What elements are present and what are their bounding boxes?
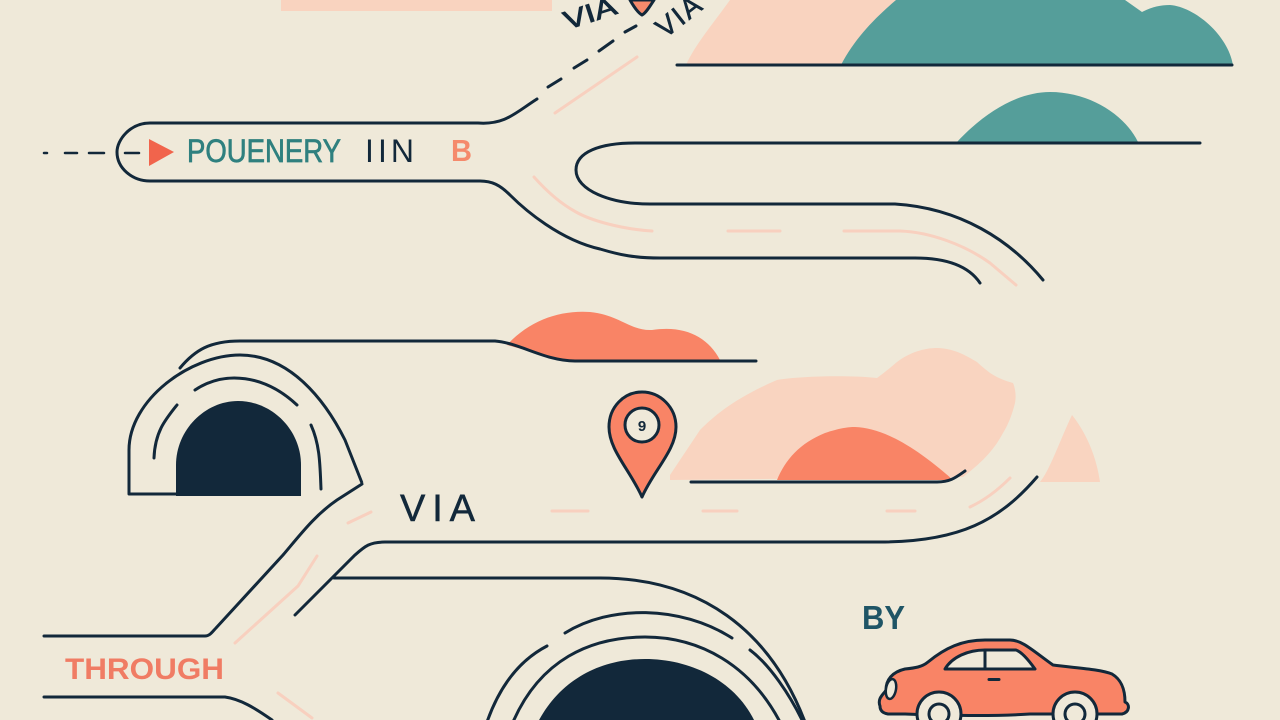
VIA label centre: VIA: [400, 488, 476, 530]
pale cloud landscape: [670, 348, 1100, 482]
pale road centre marks: [235, 57, 1016, 718]
journey label: IIN: [365, 133, 414, 169]
coral half hill: [691, 427, 965, 482]
journey label: [187, 133, 472, 169]
lower tunnel: [334, 578, 805, 720]
pale banner at top: [281, 0, 552, 11]
top pin tip: [630, 0, 654, 15]
play triangle: [149, 139, 174, 166]
entry dashed line: [44, 152, 139, 154]
upper tunnel: [129, 355, 362, 496]
start road capsule: [117, 99, 980, 283]
sweeping main road: [295, 477, 1037, 615]
dashed road to top pin: [548, 26, 636, 87]
THROUGH label: THROUGH: [65, 653, 224, 686]
coral hill on ridge: [180, 312, 756, 368]
BY label: BY: [862, 599, 905, 636]
left road upper branch: [44, 484, 362, 636]
top landscape: hills on horizon line: [677, 0, 1233, 65]
teal hill: [957, 92, 1138, 142]
location pin: 9: [638, 418, 646, 435]
journey label: B: [451, 133, 472, 168]
winding road: [576, 143, 1200, 280]
journey label: POUENERY: [187, 133, 341, 169]
car: [879, 640, 1128, 720]
left road lower branch: [44, 697, 272, 720]
location pin: [609, 392, 676, 497]
